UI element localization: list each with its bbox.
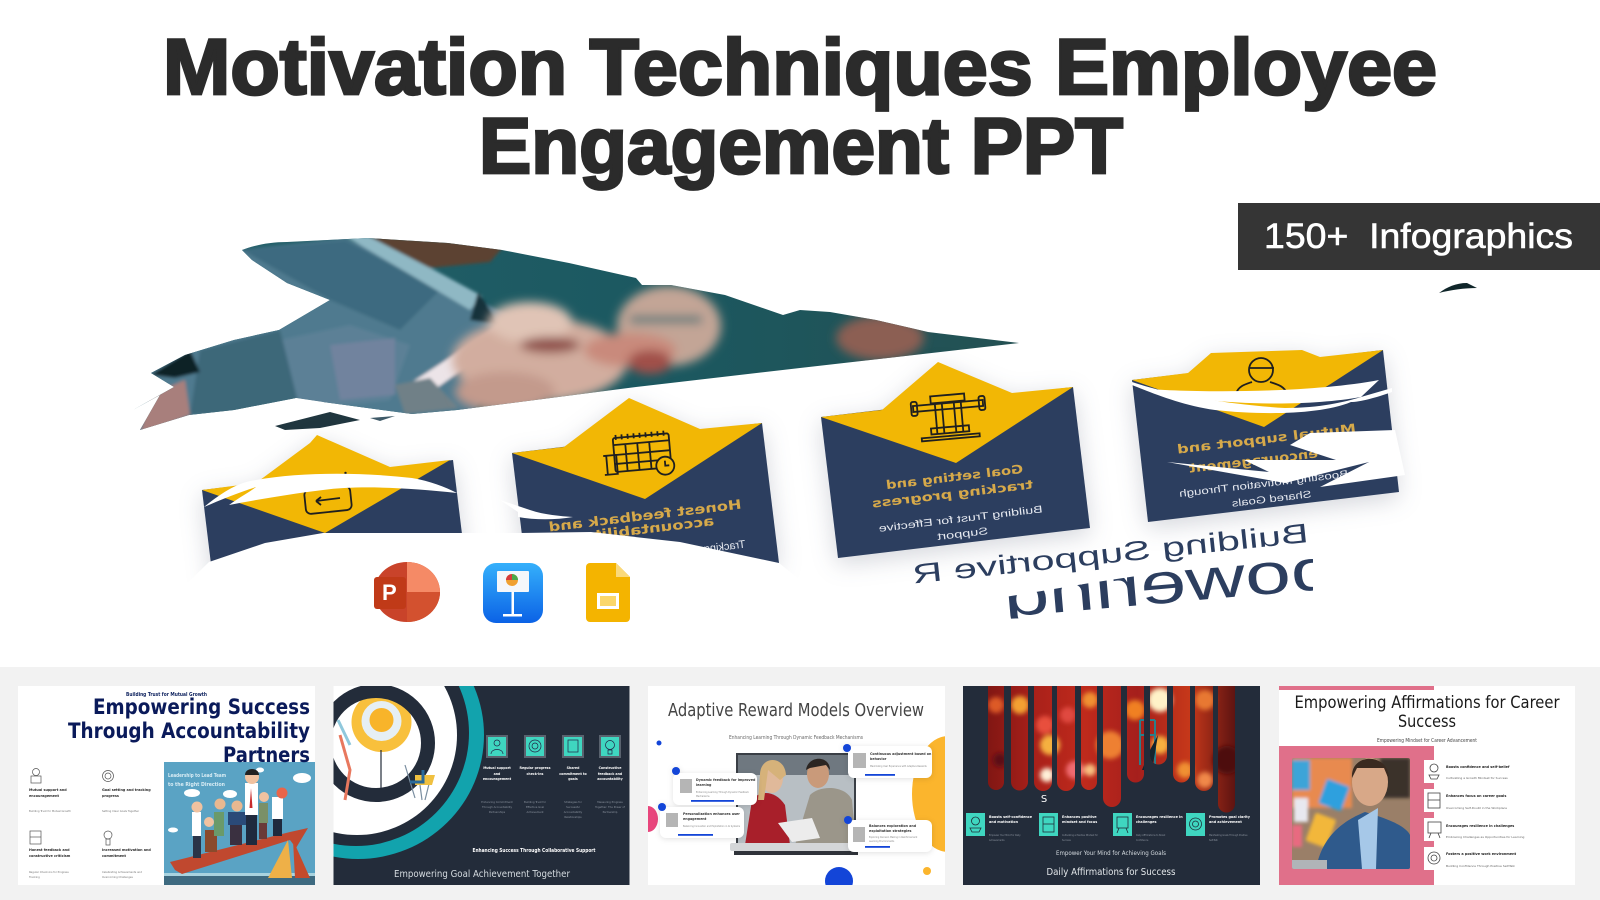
feature cards: Dynamic feedback for improved [696,778,756,782]
panel: thumbnail 4 daily affirmations: Daily Affirmations to Boost [1136,834,1165,837]
panel: thumbnail 1 accountability partners: Celebrating Achievements and [102,870,142,874]
photo: man with laptop [1292,758,1410,869]
feature cards: Exploring Decision Making in Reinforcement [869,836,917,839]
panel: thumbnail 1 accountability partners: Overcoming Challenges [102,875,134,879]
panel: thumbnail 2 goal achievement: Partnerships [489,810,506,814]
panel: thumbnail 1 accountability partners: Building Trust for Mutual Growth [29,809,71,813]
affirmation labels: challenges [1136,820,1156,824]
step labels: accountability [597,777,624,781]
items [29,768,151,858]
step labels: Constructive [599,766,621,770]
panel: thumbnail 2 goal achievement: Enhancing Commitment [481,800,513,804]
icon: calendar [601,430,675,480]
panel: thumbnail 1 accountability partners [18,686,315,885]
step labels: feedback and [598,772,623,776]
card 2: honest feedback and accountability: accountability [582,514,715,545]
affirmation labels: mindset and focus [1062,820,1097,824]
feature cards: Mechanisms [696,795,710,798]
panel: thumbnail 5 career affirmations [1279,686,1575,885]
feature cards: Balances exploration and [869,824,917,828]
panel: thumbnail 5 career affirmations: Building Confidence Through Positive Self-Talk [1446,864,1515,868]
panel: thumbnail 1 accountability partners: Regular Check-Ins for Progress [29,870,69,874]
panel: thumbnail 2 goal achievement [334,686,630,885]
panel: thumbnail 4 daily affirmations: Empower Your Mind for Achieving Goals [1056,850,1166,857]
items: commitment [102,854,126,858]
icon: worker [1236,358,1287,394]
feature cards: engagement [683,817,707,821]
panel: thumbnail 1 accountability partners: Through Accountability [68,719,310,743]
panel: thumbnail 2 goal achievement: Achievement [526,810,544,814]
panel: thumbnail 4 daily affirmations: Daily Affirmations for Success [1046,867,1176,878]
step labels [483,766,624,781]
card 4: mutual support and encouragement: encouragement [1188,445,1319,476]
items: progress [102,794,119,798]
card 4: mutual support and encouragement [1132,350,1399,522]
card 2: honest feedback and accountability [512,398,779,593]
items: Mutual support and [29,788,67,792]
card 3: goal setting and tracking progress: Support [936,526,989,543]
panel: thumbnail 2 goal achievement: Strategies for [564,800,583,804]
panel: thumbnail 1 accountability partners: Tracking [29,875,40,879]
panel: thumbnail 2 goal achievement: Relationships [564,815,582,819]
panel: thumbnail 2 goal achievement: Accountability [564,810,583,814]
card 3: goal setting and tracking progress: Goal setting and [885,462,1024,492]
panel: thumbnail 5 career affirmations: Embracing Challenges as Opportunities for Learning [1446,835,1525,839]
card 3: goal setting and tracking progress: Building Trust for Effective [878,504,1043,535]
bottom thumbnail strip [0,667,1600,900]
title: Engagement PPT [479,101,1123,190]
panel: thumbnail 2 goal achievement: Enhancing Success Through Collaborative Support [472,848,596,854]
items: Goal setting and tracking [102,788,151,792]
step labels: check-ins [527,772,544,776]
torn white strips over cards [204,380,1405,519]
photo fragment below main image [238,398,400,430]
step labels: goals [568,777,578,781]
panel: thumbnail 2 goal achievement: Measuring Progress [597,800,623,804]
panel: thumbnail 4 daily affirmations: Achievements [989,839,1005,842]
icon: Google Slides [586,563,630,622]
icon: barbell rack [910,392,988,442]
feature cards: Maximizing User Experience with Adaptive Rewards [870,765,928,768]
item text: Encourages resilience in challenges [1446,824,1514,828]
panel: thumbnail 2 goal achievement: Successful [566,805,580,809]
badge: 150+ Infographics [1238,203,1600,270]
feature cards: Continuous adjustment based on [870,752,932,756]
panel: thumbnail 4 daily affirmations: Empower Your Mind for Daily [989,834,1021,837]
panel: thumbnail 5 career affirmations: Overcoming Self-Doubt in the Workplace [1446,806,1507,810]
feature cards: learning [696,783,712,787]
panel: thumbnail 2 goal achievement: Effective Goal [526,805,544,809]
affirmation labels: and achievement [1209,820,1242,824]
decorative blobs [648,736,945,885]
item text: Enhances focus on career goals [1446,794,1506,798]
panel: thumbnail 4 daily affirmations: Self-Talk [1209,839,1218,842]
card 2: honest feedback and accountability: Honest feedback and [548,498,742,535]
card 4: mutual support and encouragement: Mutual support and [1176,420,1357,457]
step labels: commitment to [559,772,588,776]
panel: thumbnail 3 adaptive reward models [648,686,945,885]
icon: PowerPoint [374,562,440,622]
card 3: goal setting and tracking progress [821,362,1090,558]
item tabs with icons [1424,760,1443,870]
icon: PowerPoint: P [382,580,397,605]
panel: thumbnail 4 daily affirmations [963,686,1260,885]
panel: thumbnail 2 goal achievement: Partnership [603,810,618,814]
affirmation labels [989,815,1251,824]
cards [202,350,1399,630]
step labels: Shared [567,766,580,770]
panel: thumbnail 4 daily affirmations: Success [1062,839,1072,842]
panel: thumbnail 4 daily affirmations: Manifesting Goals Through Positive [1209,834,1248,837]
card 4: mutual support and encouragement: Shared Goals [1231,489,1312,510]
affirmation labels: and motivation [989,820,1019,824]
item text: Boosts confidence and self-belief [1446,765,1510,769]
panel: thumbnail 1 accountability partners: Empowering Success [93,695,310,719]
panel: thumbnail 1 accountability partners: Building Trust for Mutual Growth [126,692,207,698]
affirmation labels: Encourages resilience in [1136,815,1183,819]
badge: 150+ Infographics: 150+ Infographics [1264,217,1573,256]
panel: thumbnail 4 daily affirmations: Confidence [1136,839,1149,842]
feature cards: Personalization enhances user [683,812,740,816]
photo fragment near badge [1439,283,1477,293]
panel: thumbnail 1 accountability partners: Setting Clear Goals Together [102,809,140,813]
panel: thumbnail 2 goal achievement: Empowering Goal Achievement Together [394,869,571,880]
white sweep hiding lower edge of cards [150,532,800,667]
panel: thumbnail 2 goal achievement: Through Accountability [482,805,512,809]
step labels: and [494,772,501,776]
illustration: team on arrow: Leadership to Lead Team [168,773,226,779]
illustration: team on arrow: to the Right Direction [168,782,225,788]
step labels: Regular progress [520,766,551,770]
feature cards: Learning Environments [869,840,895,843]
panel: thumbnail 4 daily affirmations: Cultivating a Positive Mindset for [1062,834,1098,837]
item text: Fosters a positive work environment [1446,852,1517,856]
items: constructive criticism [29,854,71,858]
feature cards: Balancing Innovation and Exploitation in AI Systems [683,825,741,828]
panel: thumbnail 3 adaptive reward models: Adaptive Reward Models Overview [668,700,924,721]
laptop photo [730,753,862,855]
panel: thumbnail 2 goal achievement: Building Trust for [524,800,547,804]
icons [487,736,620,757]
icon: Keynote [483,563,543,623]
affirmation labels: Boosts self-confidence [989,815,1033,819]
concentric rings and target [334,686,484,859]
title [163,22,1437,190]
title: Motivation Techniques Employee [163,22,1437,111]
affirmation labels: Enhances positive [1062,815,1097,819]
feature cards [658,744,932,852]
photo: businessman pointing [134,238,1019,430]
panel: thumbnail 5 career affirmations: Cultivating a Growth Mindset for Success [1446,776,1508,780]
panel: thumbnail 4 daily affirmations: S [1041,794,1047,805]
card 2: honest feedback and accountability: Tracking [703,539,746,555]
step labels: Mutual support [483,766,511,770]
card 1: first envelope [202,435,470,630]
panel: thumbnail 3 adaptive reward models: Enhancing Learning Through Dynamic Feedback Mechanisms [729,735,863,741]
panel: thumbnail 5 career affirmations: Empowering Mindset for Career Advancement [1377,738,1477,744]
panel: thumbnail 2 goal achievement: Together: The Power of [595,805,625,809]
panel: thumbnail 5 career affirmations: Empowering Affirmations for Career [1294,693,1560,713]
card 4: mutual support and encouragement: Boosting Motivation Through [1179,469,1349,500]
affirmation labels: Promotes goal clarity [1209,815,1251,819]
feature cards: behavior [870,757,887,761]
items: encouragement [29,794,59,798]
step labels: encouragement [483,777,512,781]
card 3: goal setting and tracking progress: tracking progress [871,477,1034,511]
image strips [980,686,1242,816]
icons [966,813,1205,836]
panel: thumbnail 1 accountability partners: Partners [223,743,310,767]
illustration: team on arrow [164,762,315,885]
mirrored text: Building Supportive: Building Supportive R [911,518,1310,590]
item text [1446,765,1517,856]
panel: thumbnail 5 career affirmations: Success [1398,712,1456,732]
mirrored text: Empowering: Empowering [1001,526,1462,630]
feature cards: Enhancing Learning Through Dynamic Feedback [696,791,750,794]
items: Honest feedback and [29,848,70,852]
feature cards: exploitation strategies [869,829,911,833]
items: Increased motivation and [102,848,151,852]
